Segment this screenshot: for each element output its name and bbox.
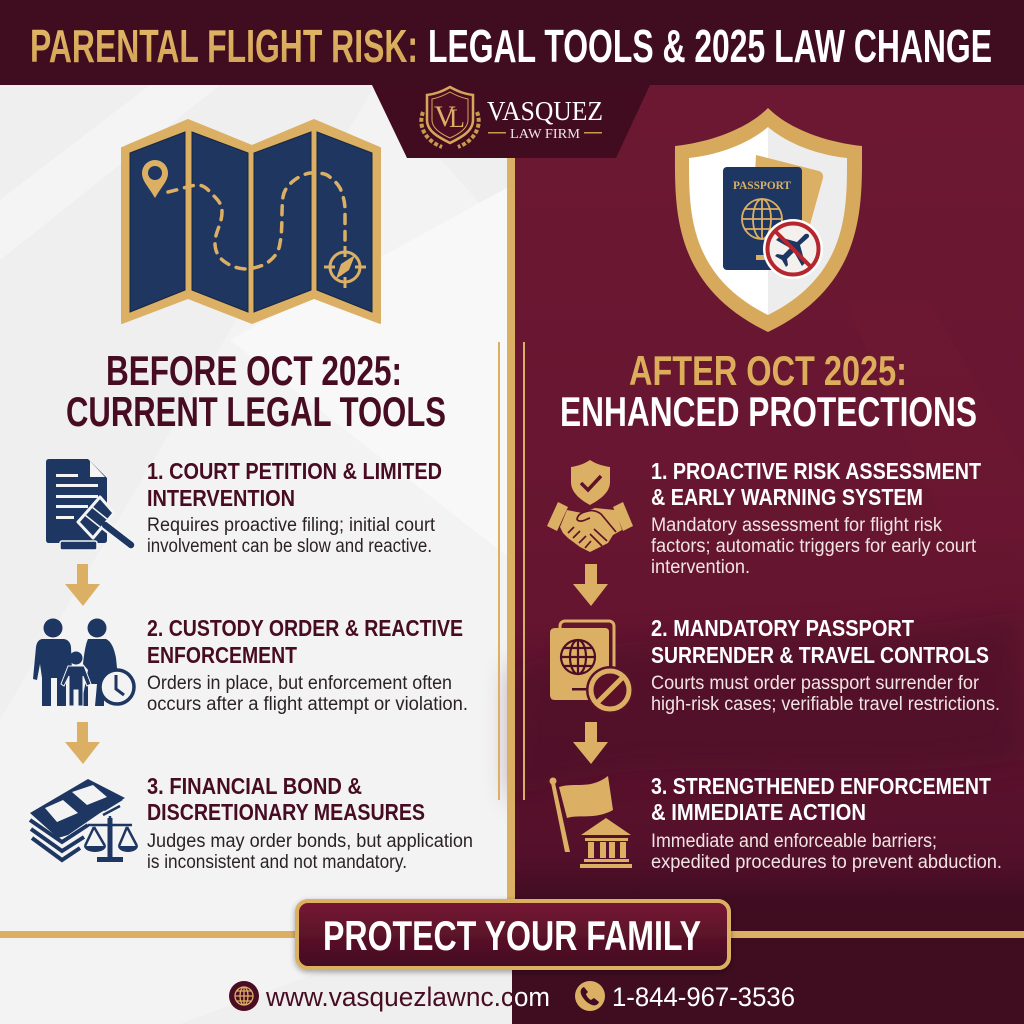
icon: phone: [575, 981, 605, 1011]
item 1 after: factors; automatic triggers for early court: [651, 536, 977, 557]
item 1 before: involvement can be slow and reactive.: [147, 536, 432, 557]
icon: globe: [229, 981, 259, 1011]
phone number: 1-844-967-3536: [612, 982, 795, 1012]
icon: cash stack and scales: [30, 779, 138, 862]
item 1 after: & EARLY WARNING SYSTEM: [651, 484, 923, 510]
item 3 after: Immediate and enforceable barriers;: [651, 831, 937, 852]
gold rule right of button: [726, 931, 1024, 938]
website: om: [514, 982, 550, 1012]
item 3 before: 3. FINANCIAL BOND &: [147, 773, 362, 799]
item 2 after: high-risk cases; verifiable travel restrictions.: [651, 694, 1000, 715]
call to action button: PROTECT YOUR FAMILY: [323, 912, 701, 959]
item 2 before: occurs after a flight attempt or violation.: [147, 694, 468, 715]
heading: before: CURRENT LEGAL TOOLS: [66, 388, 446, 435]
item 1 before: INTERVENTION: [147, 485, 295, 511]
left panel background: [0, 85, 512, 1024]
item 2 before: ENFORCEMENT: [147, 642, 297, 668]
item 3 before: DISCRETIONARY MEASURES: [147, 799, 425, 825]
icon: document and gavel: [46, 459, 131, 550]
item 2 after: 2. MANDATORY PASSPORT: [651, 615, 914, 641]
icon: flag and courthouse: [550, 776, 632, 868]
icon: passport prohibited: [550, 621, 634, 714]
heading: after: [560, 347, 977, 435]
item 2 before: [147, 615, 468, 715]
icon: VL shield crest: L: [449, 104, 465, 133]
item 3 after: expedited procedures to prevent abduction.: [651, 852, 1002, 873]
icon: VL shield crest: V: [434, 100, 456, 133]
item 1 after: [651, 458, 981, 578]
item 2 before: 2. CUSTODY ORDER & REACTIVE: [147, 615, 463, 641]
item 2 before: Orders in place, but enforcement often: [147, 673, 452, 694]
item 1 before: 1. COURT PETITION & LIMITED: [147, 458, 442, 484]
heading: after: AFTER OCT 2025:: [629, 347, 907, 394]
heading: before: [66, 347, 446, 435]
gold rule left of button: [0, 931, 300, 938]
website: www.vasquezlawnc.c: [265, 982, 514, 1012]
item 2 after: [651, 615, 1000, 715]
heading: before: BEFORE OCT 2025:: [106, 347, 402, 394]
title: [30, 20, 992, 72]
icon: shield check and handshake: [547, 460, 633, 552]
icon: VL shield crest: [421, 87, 479, 147]
firm name: VASQUEZ: [487, 96, 603, 126]
firm name: LAW FIRM: [510, 127, 581, 142]
icon: shield with passport and no-fly sign: PASSPORT: [733, 178, 791, 192]
icon: shield with passport and no-fly sign: [675, 108, 862, 332]
header band: [0, 0, 1024, 85]
icon: family with clock: [33, 618, 134, 706]
item 1 after: Mandatory assessment for flight risk: [651, 515, 942, 536]
item 1 before: [147, 458, 442, 557]
right panel background: [512, 85, 1024, 1024]
center gold divider: [507, 155, 515, 903]
right thin divider: [523, 342, 525, 800]
item 3 after: [651, 773, 1002, 873]
icon: folded route map: [122, 120, 380, 323]
firm name: [487, 96, 603, 142]
arrow right 1: [573, 564, 608, 606]
item 3 before: Judges may order bonds, but application: [147, 831, 473, 852]
logo tab: [372, 85, 650, 158]
item 3 before: is inconsistent and not mandatory.: [147, 852, 407, 873]
item 2 after: Courts must order passport surrender for: [651, 673, 980, 694]
left thin divider: [498, 342, 500, 800]
title: PARENTAL FLIGHT RISK:: [30, 20, 418, 72]
call to action button: [297, 901, 729, 968]
arrow left 2: [65, 722, 100, 764]
arrow right 2: [573, 722, 608, 764]
arrow left 1: [65, 564, 100, 606]
item 1 after: intervention.: [651, 557, 750, 578]
item 3 after: & IMMEDIATE ACTION: [651, 799, 866, 825]
item 1 before: Requires proactive filing; initial court: [147, 515, 436, 536]
item 3 before: [147, 773, 473, 873]
